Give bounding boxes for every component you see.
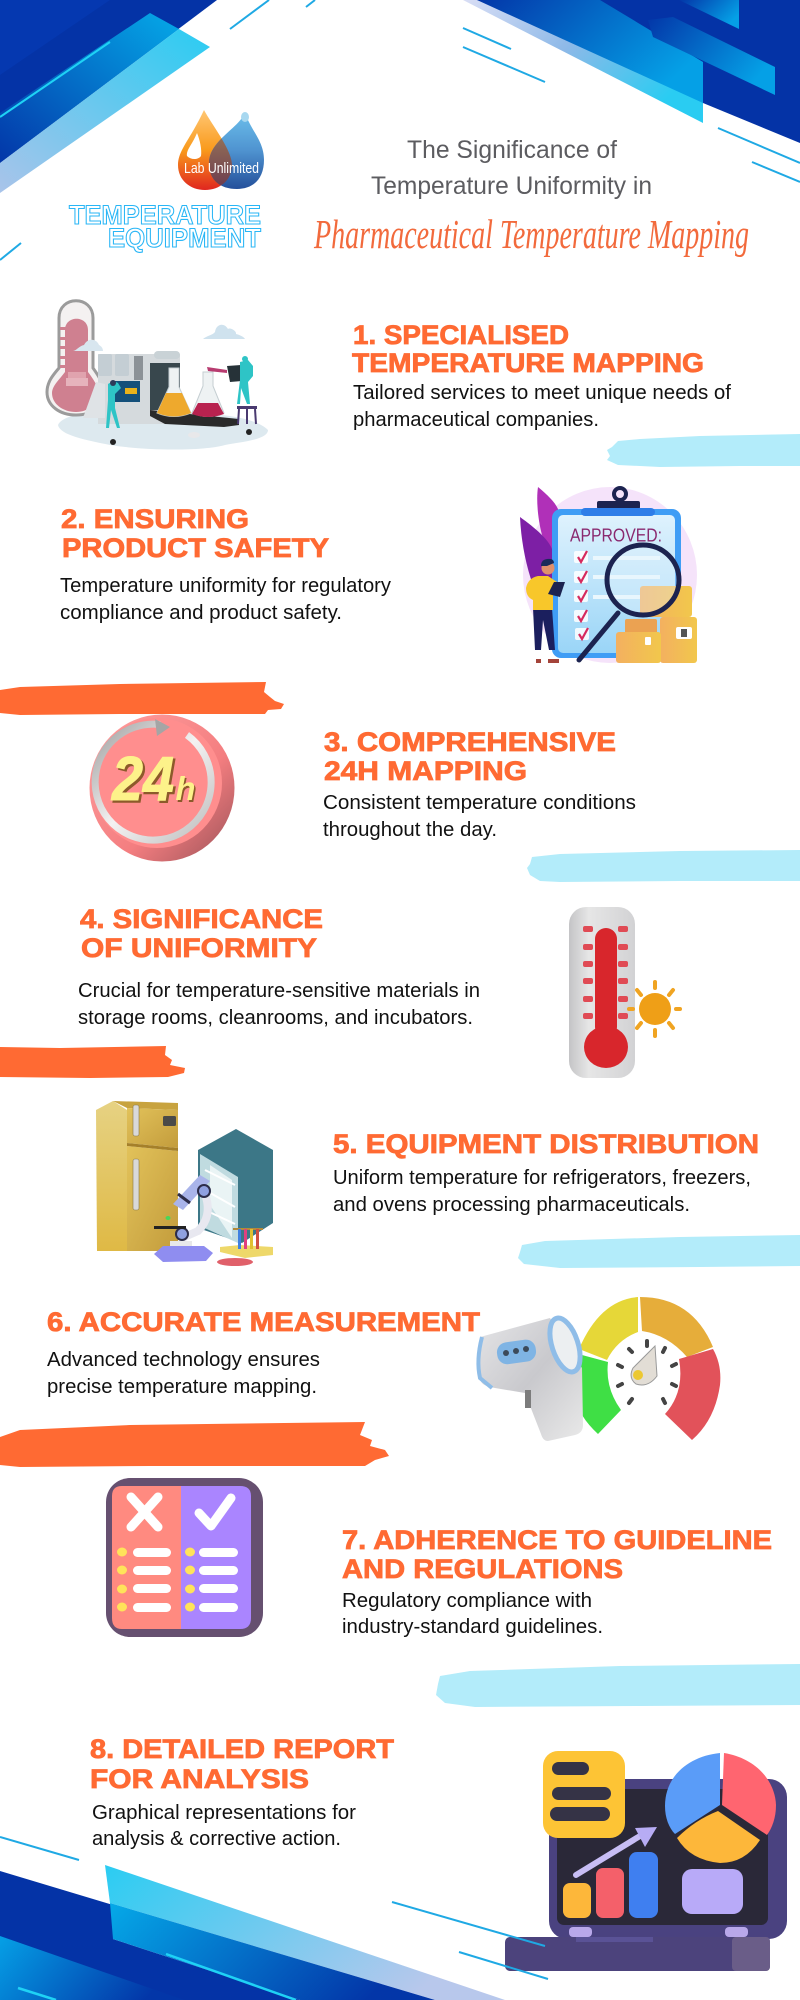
brand wordmark: temperature equipment	[69, 200, 261, 253]
icon: refrigerator, incubator and microscope	[96, 1101, 273, 1266]
step 7 text: Regulatory compliance with	[342, 1590, 592, 1612]
step 3 text: 3. COMPREHENSIVE	[324, 727, 616, 757]
step 5 text: 5. EQUIPMENT DISTRIBUTION	[333, 1129, 759, 1159]
blue brush stroke	[436, 1664, 800, 1707]
step 1 text: TEMPERATURE MAPPING	[352, 348, 704, 378]
step 1 text	[352, 320, 731, 431]
step 1 text: Tailored services to meet unique needs of	[353, 382, 731, 404]
step 8 text	[90, 1734, 395, 1850]
step 3 text: throughout the day.	[323, 819, 497, 841]
step 2 text: PRODUCT SAFETY	[62, 533, 329, 563]
orange brush stroke	[0, 682, 284, 715]
step 6 text: Advanced technology ensures	[47, 1349, 320, 1371]
brand wordmark: temperature equipment: EQUIPMENT	[108, 223, 261, 253]
step 1 text: pharmaceutical companies.	[353, 409, 599, 431]
icon: laboratory scene	[47, 301, 268, 450]
step 6 text	[47, 1307, 481, 1398]
icon: 24h clock button	[90, 714, 234, 862]
step 4 text	[78, 904, 480, 1029]
step 8 text: 8. DETAILED REPORT	[90, 1734, 395, 1764]
step 4 text: Crucial for temperature-sensitive materials in	[78, 980, 480, 1002]
step 7 text: industry-standard guidelines.	[342, 1616, 603, 1638]
icon: approved clipboard with magnifier: APPROVED:	[570, 526, 662, 546]
step 8 text: analysis & corrective action.	[92, 1828, 341, 1850]
step 2 text: Temperature uniformity for regulatory	[60, 575, 391, 597]
title	[313, 136, 749, 257]
decoration: bottom left shapes	[0, 1837, 505, 2000]
brand wordmark: temperature equipment: TEMPERATURE	[69, 200, 261, 230]
title: The Significance of	[407, 136, 617, 164]
step 7 text	[342, 1525, 772, 1638]
step 5 text: and ovens processing pharmaceuticals.	[333, 1194, 690, 1216]
decoration: top right shapes	[463, 0, 800, 182]
orange brush stroke	[0, 1046, 185, 1078]
icon: do and don't checklist	[106, 1478, 263, 1637]
step 1 text: 1. SPECIALISED	[353, 320, 569, 350]
logo: Lab Unlimited	[178, 110, 264, 190]
step 6 text: precise temperature mapping.	[47, 1376, 317, 1398]
step 3 text	[323, 727, 636, 841]
decoration: accent lines	[392, 1902, 548, 1979]
step 5 text: Uniform temperature for refrigerators, freezers,	[333, 1167, 751, 1189]
step 6 text: 6. ACCURATE MEASUREMENT	[47, 1307, 481, 1337]
icon: 24h clock button: h	[177, 772, 197, 809]
blue brush stroke	[607, 434, 800, 467]
step 4 text: OF UNIFORMITY	[81, 933, 317, 963]
step 7 text: 7. ADHERENCE TO GUIDELINE	[342, 1525, 772, 1555]
orange brush stroke	[0, 1422, 389, 1467]
step 3 text: 24H MAPPING	[324, 756, 527, 786]
step 2 text: compliance and product safety.	[60, 602, 342, 624]
blue brush stroke	[518, 1235, 800, 1268]
step 3 text: Consistent temperature conditions	[323, 792, 636, 814]
step 8 text: Graphical representations for	[92, 1802, 356, 1824]
logo: Lab Unlimited: Lab Unlimited	[184, 160, 259, 177]
step 7 text: AND REGULATIONS	[342, 1554, 623, 1584]
icon: approved clipboard with magnifier	[520, 487, 697, 663]
title: Temperature Uniformity in	[371, 172, 652, 200]
step 8 text: FOR ANALYSIS	[90, 1764, 309, 1794]
decoration: top left shapes	[0, 0, 315, 260]
step 2 text	[60, 504, 391, 624]
step 2 text: 2. ENSURING	[61, 504, 249, 534]
icon: 24h clock button: 24	[113, 747, 176, 816]
step 4 text: storage rooms, cleanrooms, and incubators.	[78, 1007, 473, 1029]
step 5 text	[333, 1129, 759, 1216]
icon: 24h clock button: 24	[111, 745, 174, 814]
icon: thermometer and sun	[569, 907, 680, 1078]
icon: infrared thermometer and gauge	[478, 1297, 720, 1441]
blue brush stroke	[527, 850, 800, 882]
step 4 text: 4. SIGNIFICANCE	[80, 904, 323, 934]
icon: 24h clock button: h	[176, 770, 196, 807]
icon: laptop dashboard with charts	[505, 1751, 787, 1971]
